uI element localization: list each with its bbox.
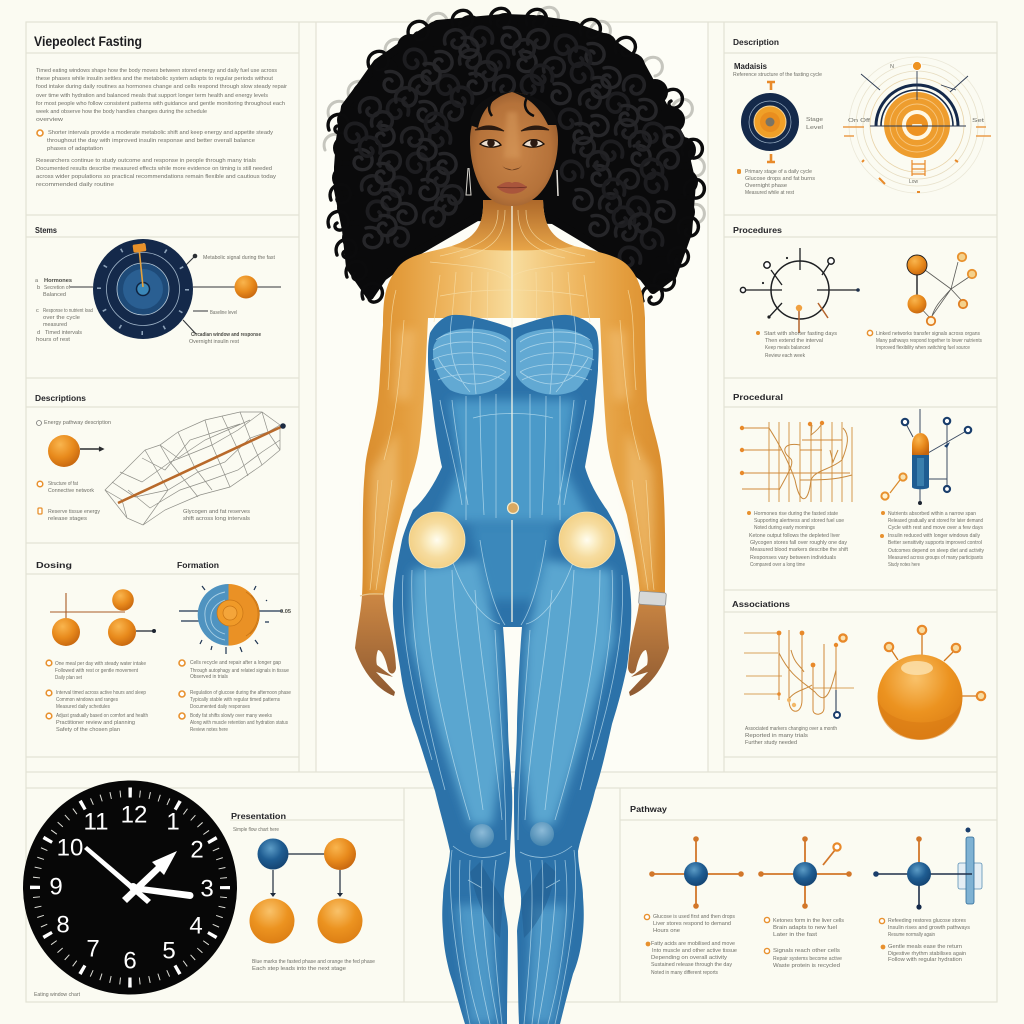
- notes left: Ketone output follows the depleted liver: [749, 533, 840, 539]
- notes: Review notes here: [190, 727, 228, 733]
- notes: Review each week: [765, 353, 805, 359]
- right labels: Overnight insulin rest: [189, 339, 239, 345]
- notes left: Measured blood markers describe the shift: [750, 547, 848, 553]
- notes: [179, 660, 291, 733]
- left labels: b: [37, 285, 40, 291]
- intro paragraph: week and observe how the body handles changes during the schedule: [35, 109, 207, 115]
- notes column three: Refeeding restores glucose stores: [888, 918, 966, 924]
- panel: formation: [177, 560, 292, 733]
- notes right: Better sensitivity supports improved control: [888, 540, 982, 546]
- disc icon: [741, 82, 799, 162]
- orange node: [234, 276, 258, 298]
- target diagram: N: [890, 64, 894, 70]
- outer curls: [328, 8, 704, 304]
- clock face: 2: [190, 836, 204, 864]
- heading: Stems: [35, 225, 57, 235]
- clock face: 8: [56, 912, 70, 938]
- subheading: Madaisis: [734, 61, 767, 71]
- caption lower: [252, 959, 375, 972]
- notes: Measured daily schedules: [56, 704, 110, 710]
- closing paragraph: [36, 158, 276, 188]
- notes: Improved flexibility when switching fuel source: [876, 345, 970, 351]
- knee left: [470, 824, 494, 848]
- notes column three: Gentle meals ease the return: [888, 944, 962, 950]
- closing paragraph: Documented results describe measured effects while more evidence on timing is still needed: [36, 166, 272, 172]
- caption: Reference structure of the fasting cycle: [733, 72, 822, 78]
- clock face: 4: [189, 912, 203, 940]
- notes: Interval timed across active hours and sleep: [56, 690, 146, 696]
- target diagram: Low: [909, 179, 919, 185]
- connector lines: [70, 256, 281, 334]
- disc notes: Primary stage of a daily cycle: [745, 169, 812, 175]
- figure: woman: [324, 7, 704, 1024]
- dial chart: [93, 239, 193, 339]
- notes: Start with shorter fasting days: [764, 331, 837, 337]
- notes: Body fat shifts slowly over many weeks: [190, 713, 272, 719]
- suit contour lines: [402, 316, 623, 1024]
- disc notes: [737, 169, 815, 196]
- notes left: Responses vary between individuals: [750, 555, 836, 561]
- disc notes: Glucose drops and fat burns: [745, 176, 815, 182]
- disc labels: Level: [806, 125, 823, 131]
- notes column one: Liver stores respond to demand: [653, 921, 731, 927]
- left labels: d: [37, 330, 40, 336]
- notes column one: Depending on overall activity: [651, 955, 727, 961]
- panel: dosing: [36, 560, 156, 733]
- notes: Daily plan set: [55, 675, 82, 681]
- caption: Energy pathway description: [44, 420, 111, 426]
- notes left: Noted during early mornings: [754, 525, 815, 531]
- heading: Description: [733, 37, 779, 47]
- caption lower: Each step leads into the next stage: [252, 966, 346, 972]
- panel: pathway: [630, 804, 982, 976]
- notes right: Cycle with rest and move over a few days: [888, 525, 983, 531]
- notes right: Released gradually and stored for later demand: [888, 518, 983, 524]
- caption: Associated markers changing over a month: [745, 726, 837, 732]
- clock face: [23, 780, 237, 994]
- arrow: [80, 447, 103, 451]
- left labels: a: [35, 278, 39, 284]
- notes column two: [764, 917, 844, 969]
- cross node one: [649, 836, 744, 909]
- notes column one: Glucose is used first and then drops: [653, 914, 735, 920]
- ghost curls: [324, 7, 704, 223]
- notes: Practitioner review and planning: [56, 720, 135, 726]
- hip disc right: [559, 512, 615, 568]
- notes: Adjust gradually based on comfort and health: [56, 713, 148, 719]
- caption lower: Blue marks the fasted phase and orange the fed phase: [252, 959, 375, 965]
- notes: [37, 481, 250, 522]
- panel: clock: [23, 780, 237, 998]
- notes right: Nutrients absorbed within a narrow span: [888, 511, 976, 517]
- clock face: 1: [166, 808, 180, 836]
- bullet note: [37, 130, 273, 152]
- right labels: [189, 255, 275, 345]
- title: Viepeolect Fasting: [34, 34, 142, 49]
- notes column three: Resume normally again: [888, 932, 935, 938]
- notes column three: Follow with regular hydration: [888, 957, 962, 963]
- caption: [745, 726, 837, 746]
- left labels: hours of rest: [36, 337, 70, 343]
- bullet note: throughout the day with improved insulin response and better overall balance: [47, 138, 255, 144]
- caption: Simple flow chart here: [233, 827, 279, 833]
- heading: Formation: [177, 560, 219, 570]
- hands: [355, 595, 669, 696]
- notes column one: Into muscle and other active tissue: [652, 948, 737, 954]
- target diagram: Set: [972, 118, 985, 124]
- notes left: Glycogen stores fall over roughly one day: [750, 540, 847, 546]
- blue suit: [393, 315, 631, 1024]
- disc notes: Measured while at rest: [745, 190, 794, 196]
- notes: release stages: [48, 516, 87, 522]
- disc labels: Stage: [806, 117, 823, 123]
- orange node: [48, 435, 80, 467]
- line diagram: [744, 630, 854, 718]
- hair mass: [338, 18, 692, 296]
- notes right: [880, 511, 984, 568]
- navel button: [508, 502, 518, 514]
- eyes: [480, 140, 544, 147]
- caption: Further study needed: [745, 740, 797, 746]
- network diagram: [907, 253, 976, 325]
- right labels: Baseline level: [210, 310, 237, 316]
- clock face: 12: [121, 802, 147, 828]
- hip disc left: [409, 512, 465, 568]
- notes: Observed in trials: [190, 674, 228, 680]
- notes left: [747, 511, 848, 568]
- notes: Many pathways respond together to lower nutrients: [876, 338, 982, 344]
- line chart grid: [740, 421, 852, 502]
- skin lines: [370, 210, 654, 590]
- notes column three: [879, 918, 970, 963]
- sphere with pins: [878, 626, 985, 740]
- centre line: [511, 205, 513, 622]
- intro paragraph: Timed eating windows shape how the body moves between stored energy and daily fuel use across: [36, 68, 277, 74]
- clock caption: Eating window chart: [34, 992, 80, 998]
- left labels: c: [36, 308, 39, 314]
- notes column two: Ketones form in the liver cells: [773, 918, 844, 924]
- bracelet: [360, 594, 383, 596]
- clock face: 10: [57, 834, 83, 862]
- notes column three: Digestive rhythm stabilises again: [888, 951, 966, 957]
- split circle chart: 0.05: [280, 609, 292, 615]
- clock face: 6: [123, 948, 137, 974]
- notes column one: [644, 914, 737, 976]
- notes left: Compared over a long time: [750, 562, 805, 568]
- disc labels: [806, 117, 823, 131]
- intro paragraph: these phases while insulin settles and the metabolic system adapts to regular periods without: [36, 76, 273, 82]
- earrings: [466, 168, 558, 196]
- notes: Connective network: [48, 488, 94, 494]
- clock face: 5: [162, 938, 176, 964]
- target diagram: On Off: [848, 118, 871, 124]
- skin: neck, shoulders, arms: [362, 200, 665, 596]
- heading: Procedural: [733, 392, 783, 402]
- bullet note: Shorter intervals provide a moderate metabolic shift and keep energy and appetite steady: [48, 130, 273, 136]
- closing paragraph: across wider populations so practical recommendations remain flexible and cautious today: [36, 174, 276, 180]
- notes column two: Repair systems become active: [773, 956, 842, 962]
- notes: Then extend the interval: [765, 338, 823, 344]
- panel: intro text: [34, 34, 287, 188]
- heading: Dosing: [36, 560, 72, 570]
- knee right: [530, 822, 554, 846]
- cross node three: [873, 828, 982, 910]
- panel: associations: [732, 599, 985, 746]
- notes left: Hormones rise during the fasted state: [754, 511, 838, 517]
- intro paragraph: [35, 68, 287, 123]
- notes: Safety of the chosen plan: [56, 727, 120, 733]
- left labels: Timed intervals: [45, 330, 82, 336]
- clock hands: [84, 846, 194, 904]
- clock face: 3: [200, 876, 214, 902]
- left labels: Secretion of: [44, 285, 70, 291]
- split circle chart: [179, 584, 292, 654]
- panel: presentation: [231, 811, 375, 972]
- notes: Typically stable with regular timed patterns: [190, 697, 280, 703]
- notes column two: Waste protein is recycled: [773, 963, 840, 969]
- caption: Reported in many trials: [745, 733, 808, 739]
- notes: [46, 660, 148, 733]
- notes: Keep meals balanced: [765, 345, 810, 351]
- face: [470, 92, 558, 206]
- notes: Followed with rest or gentle movement: [55, 668, 138, 674]
- arm highlights: [370, 330, 654, 590]
- left labels: Response to nutrient load: [43, 308, 93, 314]
- flow diagram: [250, 838, 362, 944]
- notes: Structure of fat: [48, 481, 78, 487]
- heading: Associations: [732, 599, 790, 609]
- notes: Glycogen and fat reserves: [183, 509, 250, 515]
- intro paragraph: food intake during daily routines as hormones change and cells respond through slow steady repair: [36, 84, 287, 90]
- mesh diagram: [105, 412, 286, 525]
- panel: stems dial: [35, 225, 281, 345]
- panel: procedural: [733, 392, 984, 568]
- node diagram: [50, 589, 156, 646]
- right labels: Circadian window and response: [191, 332, 262, 338]
- notes: Cells recycle and repair after a longer gap: [190, 660, 281, 666]
- intro paragraph: for most people who follow consistent patterns with guidance and gentle monitoring throughout each: [36, 101, 285, 107]
- intro paragraph: overview: [36, 117, 64, 123]
- notes: Along with muscle retention and hydration status: [190, 720, 288, 726]
- clock face: 7: [86, 936, 100, 962]
- notes column one: Sustained release through the day: [651, 962, 732, 968]
- notes column two: Signals reach other cells: [773, 948, 840, 954]
- notes: Through autophagy and related signals in tissue: [190, 668, 289, 674]
- notes column three: Insulin rises and growth pathways: [888, 925, 970, 931]
- marker dot: [193, 254, 197, 258]
- notes: Reserve tissue energy: [48, 509, 100, 515]
- notes right: Measured across groups of many participants: [888, 555, 983, 561]
- heading: Procedures: [733, 225, 782, 235]
- bullet note: phases of adaptation: [47, 146, 103, 152]
- left labels: Balanced: [43, 292, 66, 298]
- heading: Descriptions: [35, 393, 86, 403]
- target diagram: [843, 57, 991, 193]
- inner curls: [345, 27, 682, 266]
- capsule diagram: [881, 409, 971, 505]
- notes right: Study notes here: [888, 562, 920, 568]
- intro paragraph: over time with hydration and balanced meals that support longer term health and energy levels: [36, 93, 268, 99]
- closing paragraph: Researchers continue to study outcome and response in people through many trials: [36, 158, 256, 164]
- scalloped edge: [332, 13, 698, 280]
- panel: descriptions mesh: [35, 393, 286, 525]
- notes: shift across long intervals: [183, 516, 250, 522]
- notes left: Supporting alertness and stored fuel use: [754, 518, 844, 524]
- notes: Linked networks transfer signals across organs: [876, 331, 980, 337]
- closing paragraph: recommended daily routine: [36, 182, 114, 188]
- notes column two: Later in the fast: [773, 932, 818, 938]
- notes: One meal per day with steady water intake: [55, 661, 146, 667]
- suit shading: [410, 329, 614, 1024]
- notes right: Outcomes depend on sleep diet and activity: [888, 548, 984, 554]
- clock face: 11: [84, 808, 108, 836]
- notes column one: Hours one: [653, 928, 680, 934]
- left labels: over the cycle: [43, 315, 80, 321]
- neck shading: [452, 200, 574, 250]
- notes column two: Brain adapts to new fuel: [773, 925, 837, 931]
- notes right: Insulin reduced with longer windows daily: [888, 533, 980, 539]
- clock face: 9: [49, 874, 63, 900]
- notes column one: Noted in many different reports: [651, 970, 718, 976]
- watch: [639, 591, 666, 606]
- nose: [502, 165, 522, 170]
- disc notes: Overnight phase: [745, 183, 787, 189]
- lips: [497, 182, 527, 194]
- heading: Presentation: [231, 811, 286, 821]
- left labels: [35, 278, 93, 343]
- forehead locks: [470, 92, 558, 128]
- notes: Regulation of glucose during the afternoon phase: [190, 690, 291, 696]
- ring diagram: [740, 248, 860, 333]
- notes: Documented daily responses: [190, 704, 250, 710]
- cross node two: [758, 836, 852, 909]
- hair: [324, 7, 704, 304]
- heading: Pathway: [630, 804, 667, 814]
- left labels: Hormones: [44, 278, 72, 284]
- notes: [756, 330, 982, 359]
- notes column one: Fatty acids are mobilised and move: [651, 941, 735, 947]
- brows: [475, 126, 549, 131]
- notes: Common windows and ranges: [56, 697, 118, 703]
- panel: procedures: [733, 225, 982, 359]
- panel: description targets: [733, 37, 991, 196]
- right labels: Metabolic signal during the fast: [203, 255, 275, 261]
- left labels: measured: [43, 322, 67, 328]
